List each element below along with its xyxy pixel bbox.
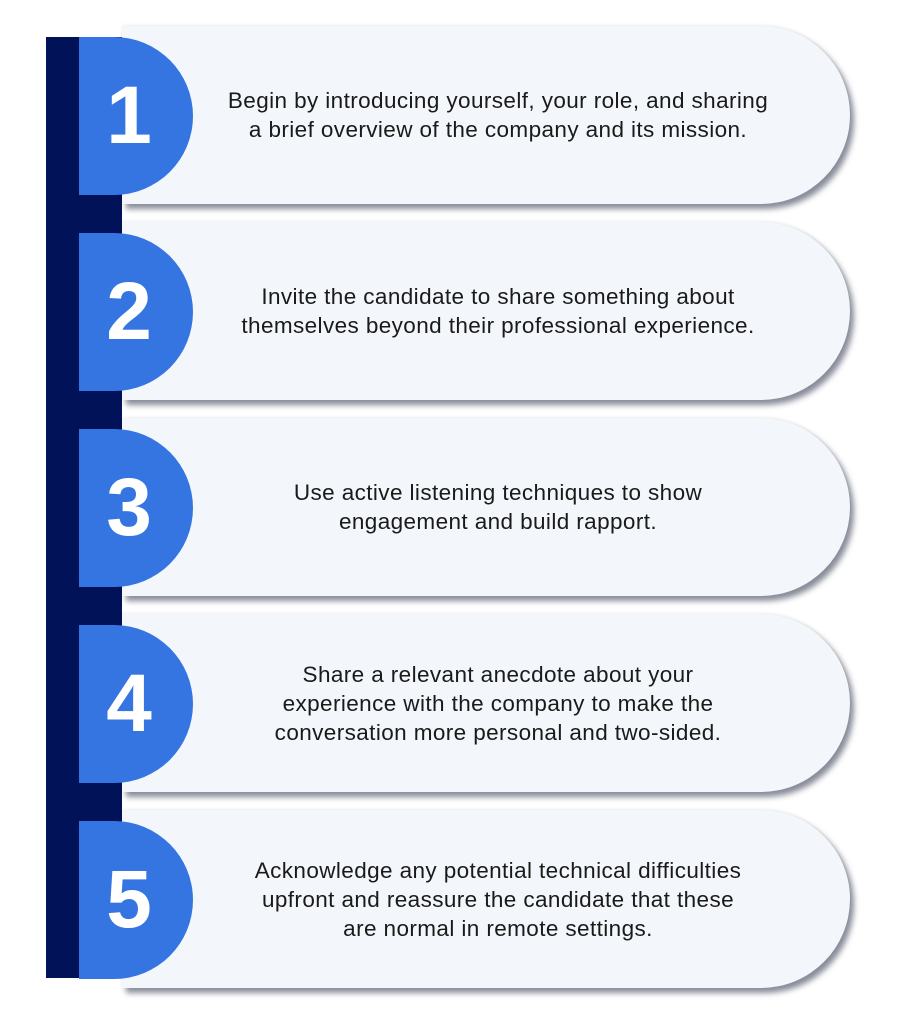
card 3: engagement and build rapport. bbox=[339, 509, 657, 534]
badge 5: 5 bbox=[106, 854, 152, 945]
card 5: upfront and reassure the candidate that these bbox=[262, 886, 734, 912]
card 5: are normal in remote settings. bbox=[343, 916, 653, 940]
card 4 bbox=[122, 614, 850, 792]
card 1 bbox=[122, 26, 850, 204]
card 3 bbox=[122, 418, 850, 596]
card 2: Invite the candidate to share something about bbox=[261, 284, 735, 309]
card 2 bbox=[122, 222, 850, 400]
badge 2 bbox=[79, 233, 193, 391]
card 3: Use active listening techniques to show bbox=[294, 480, 702, 505]
badge 4: 4 bbox=[106, 658, 152, 749]
badge 2: 2 bbox=[106, 266, 152, 357]
badge 4 bbox=[79, 625, 193, 783]
badge 3: 3 bbox=[106, 462, 152, 553]
card 1: Begin by introducing yourself, your role, and sharing bbox=[228, 88, 768, 113]
badge 1 bbox=[79, 37, 193, 195]
card 5 bbox=[122, 810, 850, 988]
badge 3 bbox=[79, 429, 193, 587]
badge 5 bbox=[79, 821, 193, 979]
card 1: a brief overview of the company and its mission. bbox=[249, 117, 747, 142]
card 4: conversation more personal and two-sided. bbox=[275, 720, 721, 744]
timeline bar bbox=[46, 37, 122, 978]
badge 1: 1 bbox=[106, 70, 152, 161]
card 4: experience with the company to make the bbox=[283, 690, 713, 716]
card 5: Acknowledge any potential technical difficulties bbox=[255, 858, 741, 882]
card 2: themselves beyond their professional experience. bbox=[241, 313, 755, 338]
card 4: Share a relevant anecdote about your bbox=[303, 662, 693, 686]
